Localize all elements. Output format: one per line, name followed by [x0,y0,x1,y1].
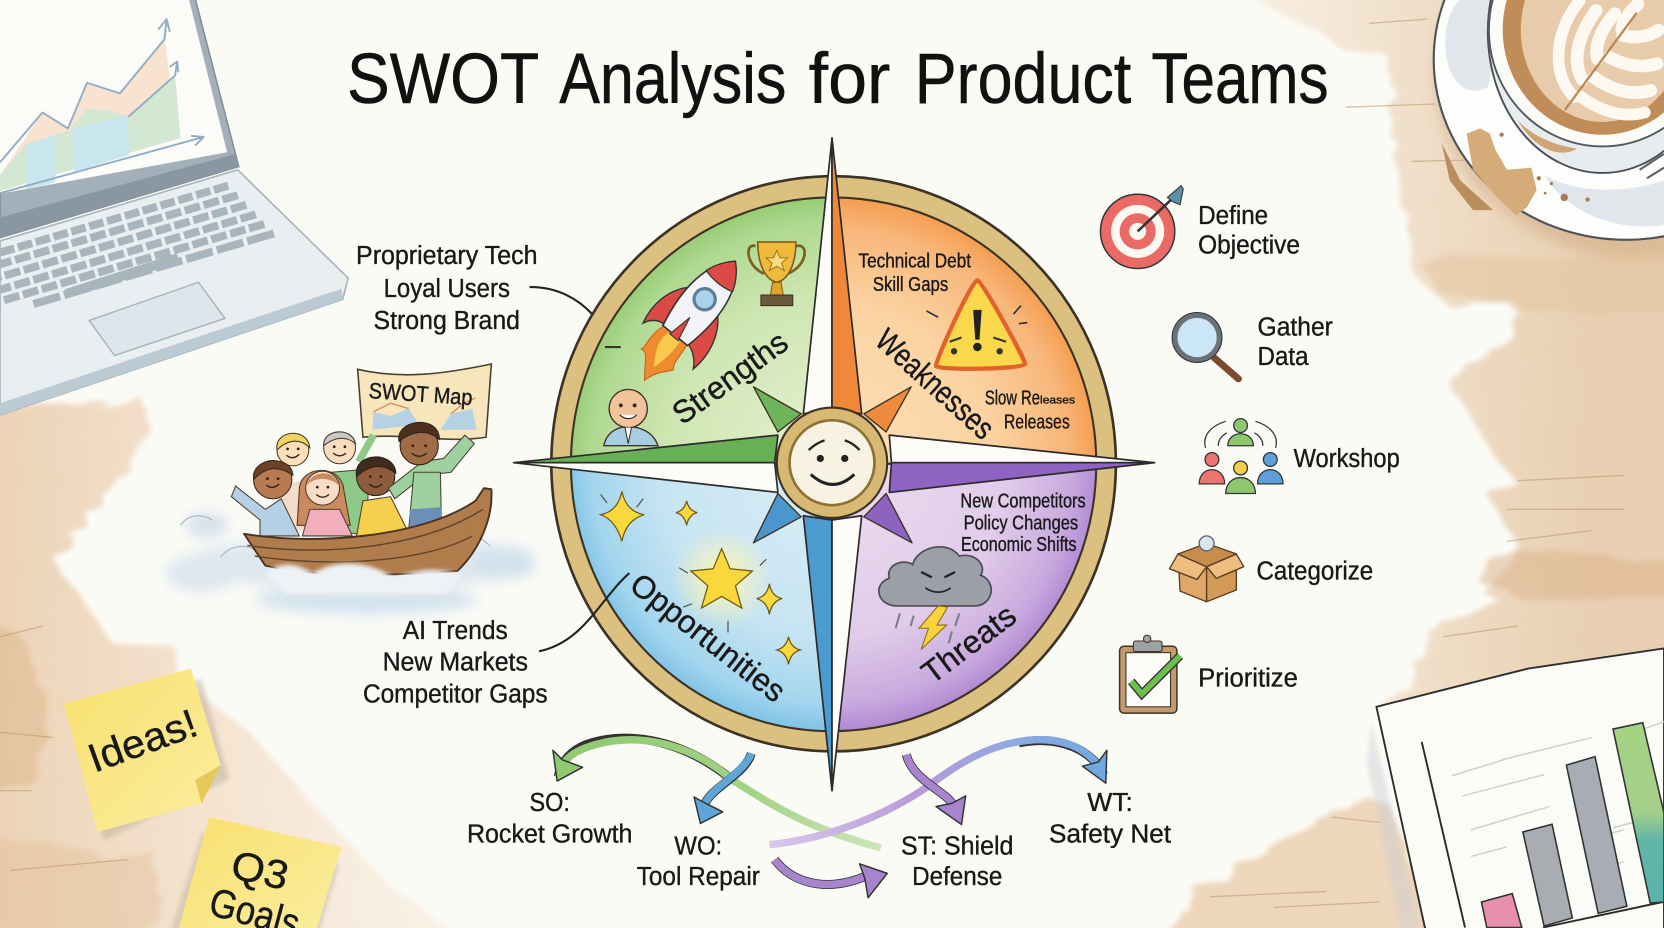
title: Teams [1151,40,1329,119]
strategy arrow: WO to ST small purple [775,860,887,898]
compass main needles [514,138,1155,791]
step label: Categorize [1256,557,1373,585]
quadrant label: Opportunities: Opportunities [623,566,793,709]
touchpad [89,282,225,356]
strategy arrow: ST purple [906,755,966,825]
team member: blond [277,433,318,531]
leader line: opportunities [539,573,629,651]
coffee spill on saucer [1467,128,1537,215]
coffee cup and saucer [1434,0,1664,257]
team eyes [266,444,427,488]
note paper [64,669,221,832]
note text: Ideas! [82,700,203,781]
team member: boy in yellow [356,457,408,539]
boat planks [247,509,483,562]
quadrant: threats [832,464,1096,731]
quadrant: strengths [571,197,832,464]
team member: girl in pink [297,470,352,536]
strategy label: WT [1049,789,1171,849]
cloud outlines [180,516,490,589]
strategy arrow: WT purple to blue [769,740,1107,845]
icon: workshop group [1199,419,1283,493]
boat illustration: team on clouds with SWOT map [166,364,536,614]
callout: strengths list: Strong Brand [374,307,520,335]
icon: magnifier [1172,313,1238,379]
rocket icon [614,239,764,401]
sparkle marks [601,495,766,632]
team member: boy in blue shirt [231,461,299,536]
green bar [1613,723,1664,903]
saucer shadow [1435,0,1664,257]
weaknesses small labels: Skill Gaps [873,274,948,296]
callout: strengths list: Proprietary Tech [356,242,538,270]
strategy label: ST: Defense [912,863,1002,891]
sticky note: Q3 Goals [170,817,342,928]
strategy label: WO: WO: [674,832,722,860]
east needle [889,435,1155,463]
step label [1198,202,1300,260]
saucer grey wash [1445,0,1664,226]
quadrant label: Strengths: Strengths [665,324,795,431]
spill droplets [1500,133,1590,202]
weaknesses small labels: leases [1040,394,1075,406]
leader line: strengths [530,287,592,314]
strategy label: WO: Tool Repair [637,863,760,891]
team member: grey hair [324,432,374,536]
big star [691,549,752,608]
title [347,40,1329,119]
threats small labels [960,490,1086,556]
star icons [601,491,800,664]
watercolor wash: lower right wood table [1167,798,1443,928]
warning burst marks [926,306,1027,324]
step label: Workshop [1294,445,1400,473]
banner: SWOT Map: SWOT Map [368,378,473,410]
quadrant: weaknesses [832,197,1096,464]
threats small labels: New Competitors [960,490,1086,512]
small dash mark [605,346,621,348]
strategy label: WT: Safety Net [1049,821,1171,849]
hinge shadow [0,154,239,238]
screen chart areas [0,39,176,180]
sales bar chart paper [1367,648,1664,928]
threats small labels: Policy Changes [964,513,1078,535]
process step: workshop [1199,419,1400,493]
grey bar small [1523,824,1572,926]
team faces [266,453,427,497]
sticky note: Ideas [64,669,229,840]
coffee stain under saucer [1442,143,1493,210]
note text: Q3 [227,841,293,899]
step label: Objective [1198,232,1300,260]
cup [1488,0,1664,173]
strategy label: ST [901,832,1013,891]
strategy label: SO: SO: [530,789,570,817]
pink bar [1481,894,1522,928]
strategy label: WO [637,832,760,891]
icon: open box [1169,536,1244,602]
storm cloud icon [879,547,991,649]
cup side stain [1518,120,1577,153]
wooden boat [244,488,492,575]
grid lines [1452,722,1664,897]
paper sheet [1376,648,1664,928]
step label: Prioritize [1198,665,1298,693]
strategy arrow: SO green [553,738,881,848]
laptop illustration [0,0,348,415]
paper shadow [1367,722,1420,928]
callout: strengths list [356,242,538,335]
clouds [166,513,536,614]
step label: Data [1258,343,1309,371]
cup handle [1640,154,1664,178]
icon: clipboard [1120,635,1180,713]
process step: gather data [1172,313,1333,379]
trophy icon [748,242,805,306]
saucer [1434,0,1664,240]
laptop screen bezel [0,0,239,238]
wheel gold ring [551,176,1116,751]
callout: opportunities list [363,617,548,709]
south needle [803,516,832,791]
title: Analysis [559,40,786,119]
banner: SWOT Map [358,364,491,439]
strategy label: SO [467,789,632,849]
note paper [177,817,342,928]
SWOT compass wheel [514,138,1155,791]
strategy label: WT: WT: [1087,789,1133,817]
strategy label: SO: Rocket Growth [467,821,632,849]
grey bar tall [1566,757,1627,913]
latte art leaf [1523,0,1664,148]
note shadow [170,833,340,928]
laptop screen [0,0,227,194]
weaknesses small labels: Slow Re [985,387,1040,409]
foam [1521,0,1664,122]
laptop base shading [0,289,343,415]
watercolor wash: right wood table [1240,0,1664,709]
weaknesses small labels: Technical Debt [859,250,971,272]
coffee [1503,0,1664,135]
title: Product [915,40,1131,119]
quadrant label: Threats: Threats [915,597,1023,691]
keyboard keys [0,186,274,305]
process step: prioritize [1120,635,1298,713]
threats small labels: Economic Shifts [961,534,1077,556]
glow behind big star [671,527,773,629]
callout: opportunities list: Competitor Gaps [363,681,548,709]
cup rim [1489,0,1664,146]
icon: target [1100,186,1183,268]
step label [1258,313,1333,371]
callout: opportunities list: New Markets [383,649,528,677]
manager avatar [604,389,658,446]
weaknesses small labels [859,250,1075,434]
quadrant label: Weaknesses: Weaknesses [869,322,1002,446]
screen chart lines [0,19,204,193]
laptop base [0,170,348,415]
process step: categorize [1169,536,1373,602]
sparkle stars [601,491,800,664]
process step: define objective [1100,186,1300,268]
title: SWOT [347,40,539,119]
cloud over boat [265,563,462,594]
compass diagonal points [753,387,912,543]
step label: Define [1198,202,1268,230]
chart axes [1422,742,1664,928]
callout: opportunities list: AI Trends [403,617,508,645]
compass hub with face [777,408,887,518]
weaknesses small labels: Releases [1004,412,1070,434]
quadrant: opportunities [571,464,832,731]
note curl [195,765,221,803]
strategy label: ST: ST: Shield [901,832,1013,860]
watercolor wash: left wood table [0,399,467,928]
warning triangle icon [936,280,1025,369]
callout: strengths list: Loyal Users [384,275,510,303]
north needle [803,138,832,414]
note shadow [70,679,229,840]
strategy arrow: WO blue [694,753,751,824]
team member: boy raising banner [388,422,474,536]
step label: Gather [1258,313,1333,341]
title: for [809,40,890,119]
west needle [514,435,778,463]
